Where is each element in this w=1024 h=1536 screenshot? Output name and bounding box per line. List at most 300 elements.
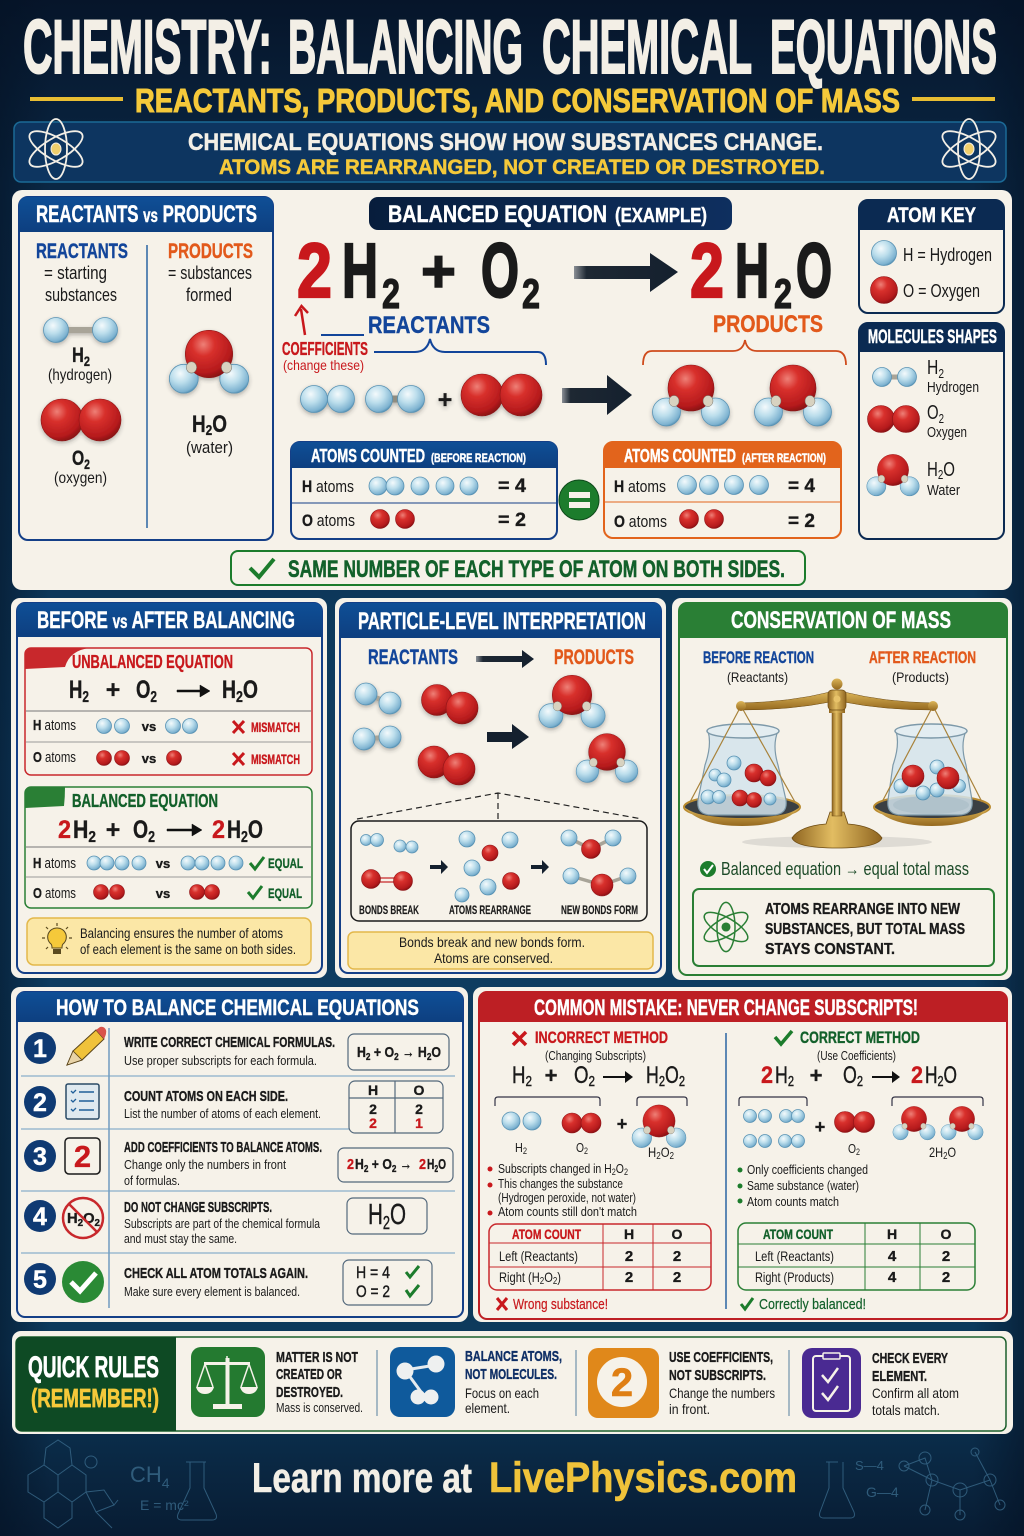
equation: reactants side <box>297 228 540 317</box>
rule: check: Confirm all atom <box>872 1385 959 1401</box>
sub-panel: balanced equation: H <box>73 816 91 844</box>
table: atoms counted after: (AFTER REACTION) <box>742 451 826 465</box>
label: reactants with brace: REACTANTS <box>368 312 490 339</box>
table: incorrect atom count: H <box>624 1226 634 1242</box>
table: incorrect atom count: 2 <box>673 1269 681 1286</box>
sub-panel: unbalanced equation: MISMATCH <box>251 720 300 735</box>
callout: balancing tip: of each element is the same on both sides. <box>80 941 296 957</box>
banner: intro statement <box>14 119 1006 182</box>
rule: check: CHECK EVERY <box>872 1350 948 1367</box>
column: incorrect method: Atom counts still don't match <box>498 1204 637 1219</box>
panel: conservation of mass <box>672 598 1012 980</box>
step 2: 2 <box>33 1089 47 1117</box>
molecules: reactants row: + <box>438 386 452 414</box>
banner: intro statement: CHEMICAL EQUATIONS SHOW HOW SUBSTANCES CHANGE. <box>188 129 823 156</box>
column: incorrect method: O <box>576 1140 586 1155</box>
column: incorrect method: 2 <box>656 1151 661 1162</box>
icon: coefficient 2 <box>65 1138 100 1174</box>
callout: atoms rearrange: ATOMS REARRANGE INTO NEW <box>765 901 961 918</box>
column: correct method: 2 <box>857 1073 863 1090</box>
panel: reactants vs products: 2 <box>84 456 90 472</box>
panel: before vs after balancing <box>11 598 327 978</box>
panel: molecule shapes: 2 <box>939 411 944 426</box>
equation: product side <box>690 228 832 317</box>
rule: atoms: BALANCE ATOMS, <box>465 1348 562 1365</box>
step 4 <box>24 1198 427 1246</box>
beakers <box>698 731 786 815</box>
rule: atoms: NOT MOLECULES. <box>465 1366 557 1383</box>
column: incorrect method: O <box>665 1062 679 1089</box>
sub-panel: balanced equation <box>25 787 312 908</box>
step 4: DO NOT CHANGE SUBSCRIPTS. <box>124 1199 272 1216</box>
step 5: Make sure every element is balanced. <box>124 1284 300 1299</box>
icon: pencil <box>67 1027 106 1065</box>
column: correct method: CORRECT METHOD <box>800 1028 920 1047</box>
callout: atoms rearrange: SUBSTANCES, BUT TOTAL MASS <box>765 921 965 938</box>
H2 molecule <box>44 318 118 342</box>
step 2: COUNT ATOMS ON EACH SIDE. <box>124 1088 288 1105</box>
panel: atom key <box>859 200 1004 313</box>
rule: atoms: element. <box>465 1400 510 1416</box>
icon: light bulb <box>42 923 72 954</box>
table: atoms counted before <box>291 442 557 539</box>
step 3: 2 <box>434 1164 438 1175</box>
panel: conservation of mass: (Products) <box>892 669 949 685</box>
icon: number 2: 2 <box>611 1361 633 1405</box>
table: correct atom count: O <box>941 1226 952 1242</box>
step 3: H <box>355 1156 366 1173</box>
heading: balanced equation: BALANCED EQUATION <box>388 201 607 228</box>
step 3 <box>24 1138 453 1188</box>
panel: reactants vs products: 2 <box>206 422 212 439</box>
table: correct atom count: H <box>887 1226 897 1242</box>
panel: molecule shapes: H <box>927 459 941 481</box>
step 3: H <box>427 1156 438 1173</box>
panel: quick rules: QUICK RULES <box>28 1351 159 1384</box>
step 3: 2 <box>392 1164 397 1175</box>
callout: same number of atoms: SAME NUMBER OF EACH TYPE OF ATOM ON BOTH SIDES. <box>288 556 785 583</box>
panel: reactants vs products: H <box>72 344 87 367</box>
table: correct atom count: Right (Products) <box>755 1269 834 1285</box>
panel: molecule shapes: 2 <box>938 366 944 381</box>
footer: website <box>252 1454 797 1502</box>
table: correct atom count: 2 <box>942 1269 950 1286</box>
panel: molecule shapes: O <box>927 402 943 424</box>
arrow: main equation <box>574 253 678 292</box>
callout: atoms conserved: Atoms are conserved. <box>434 950 553 966</box>
panel: particle-level interpretation: REACTANTS <box>368 646 458 669</box>
panel: reactants vs products <box>19 197 273 540</box>
sub-panel: unbalanced equation: H <box>69 676 87 704</box>
table: correct atom count: 4 <box>888 1248 897 1265</box>
panel: reactants vs products: = substances <box>168 263 252 283</box>
sub-panel: balanced equation: BALANCED EQUATION <box>72 791 218 811</box>
step 3: 2 <box>347 1156 354 1173</box>
column: correct method: 2 <box>911 1062 923 1089</box>
sub-panel: balanced equation: EQUAL <box>268 885 302 901</box>
rule: coefficients: in front. <box>669 1401 710 1417</box>
right contents <box>930 760 944 774</box>
column: incorrect method: H <box>646 1062 663 1089</box>
step 3: of formulas. <box>124 1173 180 1188</box>
label: products with brace <box>643 311 846 365</box>
panel: conservation of mass: (Reactants) <box>727 669 788 685</box>
sub-panel: unbalanced equation: O <box>243 676 258 704</box>
column: incorrect method: Subscripts changed in H <box>498 1161 639 1176</box>
arrow: reaction <box>487 724 529 749</box>
equation: reactants side: + <box>421 238 456 305</box>
rule: atoms <box>390 1347 562 1417</box>
table: correct atom count: ATOM COUNT <box>763 1226 833 1242</box>
rule: coefficients: NOT SUBSCRIPTS. <box>669 1367 766 1384</box>
table: atoms counted before: = 4 <box>498 476 526 497</box>
icon: no H2O2: 2 <box>78 1218 84 1229</box>
panel: quick rules <box>12 1331 1013 1434</box>
step 3: ADD COEFFICIENTS TO BALANCE ATOMS. <box>124 1139 322 1156</box>
table: correct atom count: Left (Reactants) <box>755 1248 834 1264</box>
step 1: Use proper subscripts for each formula. <box>124 1053 317 1068</box>
label: products with brace: PRODUCTS <box>713 311 823 338</box>
step 5: 5 <box>33 1266 47 1294</box>
column: incorrect method: 2 <box>679 1073 685 1090</box>
panel: reactants vs products: O <box>72 447 88 470</box>
step 4: H <box>368 1199 389 1231</box>
column: correct method: 2H <box>929 1144 947 1160</box>
column: incorrect method: O <box>661 1144 670 1160</box>
panel: conservation of mass: BEFORE REACTION <box>703 648 814 667</box>
panel: reactants vs products: (hydrogen) <box>48 367 112 384</box>
panel: how to balance: HOW TO BALANCE CHEMICAL EQUATIONS <box>56 995 419 1020</box>
footer decoration: left chemistry sketches: 4 <box>162 1475 170 1491</box>
table: atoms counted before: H atoms <box>302 477 354 496</box>
panel: molecule shapes: O <box>943 459 955 481</box>
sub-panel: balanced equation: 2 <box>212 816 225 844</box>
post and base <box>792 812 882 848</box>
rule: coefficients <box>588 1348 775 1418</box>
column: incorrect method: 2 <box>659 1073 665 1090</box>
column: correct method: O <box>843 1062 862 1089</box>
sub-panel: balanced equation: vs <box>156 886 170 901</box>
rule: check: totals match. <box>872 1402 940 1418</box>
O2 molecule <box>41 399 121 441</box>
step 1: 2 <box>394 1052 399 1063</box>
panel: main white card <box>12 190 1012 590</box>
column: correct method: H <box>925 1062 942 1089</box>
table: incorrect atom count: ATOM COUNT <box>512 1226 581 1242</box>
strings <box>690 706 982 802</box>
step 5: H = 4 <box>356 1263 390 1282</box>
heading: balanced equation: (EXAMPLE) <box>615 205 707 227</box>
sub-panel: balanced equation: 2 <box>58 816 71 844</box>
column: incorrect method: INCORRECT METHOD <box>535 1028 668 1047</box>
callout: coefficients: COEFFICIENTS <box>282 339 368 359</box>
icon: molecules white <box>390 1347 455 1417</box>
table: atoms counted before: = 2 <box>498 510 526 531</box>
icon: checklist <box>66 1084 99 1119</box>
icon: coefficient 2: 2 <box>74 1139 91 1174</box>
sub-panel: balanced equation: EQUAL <box>268 855 303 871</box>
column: incorrect method: 2 <box>624 1167 628 1177</box>
footer decoration: left chemistry sketches: E = mc² <box>140 1497 189 1513</box>
label: reactants with brace <box>368 312 546 365</box>
column: incorrect method <box>488 1028 711 1313</box>
table: atoms counted after: ATOMS COUNTED <box>624 446 736 466</box>
step 1: H <box>357 1044 368 1061</box>
equation: product side: O <box>796 228 832 314</box>
sub-panel: bond process: NEW BONDS FORM <box>561 903 638 917</box>
table: correct atom count: 4 <box>888 1269 897 1286</box>
step 5: O = 2 <box>356 1282 390 1301</box>
title <box>23 5 997 90</box>
molecules: products row <box>652 365 832 426</box>
column: incorrect method: 2 <box>670 1151 674 1162</box>
statement: equal total mass: Balanced equation → equal total mass <box>721 859 969 879</box>
step 2: 2 <box>369 1115 377 1131</box>
panel: molecule shapes: Oxygen <box>927 424 967 441</box>
table: atoms counted before: ATOMS COUNTED <box>311 446 425 466</box>
icon: scales <box>191 1347 265 1417</box>
sub-panel: unbalanced equation: 2 <box>82 689 89 706</box>
panel: particle-level interpretation: PRODUCTS <box>554 646 634 669</box>
sub-panel: unbalanced equation: H atoms <box>33 717 76 734</box>
sub-panel: bond process: BONDS BREAK <box>359 903 419 917</box>
step 4: and must stay the same. <box>124 1231 237 1246</box>
footer decoration: left chemistry sketches: CH <box>130 1462 162 1487</box>
table: atoms counted before: (BEFORE REACTION) <box>431 451 526 465</box>
table: incorrect atom count: 2 <box>540 1276 545 1287</box>
column: correct method: 2 <box>788 1073 794 1090</box>
sub-panel: balanced equation: O atoms <box>33 885 76 902</box>
callout: balancing tip <box>27 918 311 965</box>
sub-panel: balanced equation: + <box>106 816 120 844</box>
table: incorrect atom count: 2 <box>553 1276 558 1287</box>
arrow: reactants to products <box>476 650 534 668</box>
column: incorrect method: H <box>648 1144 658 1160</box>
step 3: Change only the numbers in front <box>124 1157 286 1172</box>
panel: atom key: H = Hydrogen <box>903 245 992 265</box>
sub-panel: unbalanced equation: MISMATCH <box>251 752 300 767</box>
column: incorrect method: 2 <box>589 1073 595 1090</box>
callout: atoms rearrange <box>693 889 994 966</box>
step 1: O <box>431 1044 441 1061</box>
panel: conservation of mass: AFTER REACTION <box>869 648 976 667</box>
panel: reactants vs products: (water) <box>186 438 233 457</box>
footer: website: LivePhysics.com <box>489 1454 797 1502</box>
column: correct method: O <box>848 1141 858 1156</box>
column: incorrect method: This changes the substance <box>498 1176 623 1191</box>
table: incorrect atom count <box>489 1224 711 1290</box>
step 1: 2 <box>366 1052 371 1063</box>
sub-panel: unbalanced equation: 2 <box>236 689 243 706</box>
sub-panel: balanced equation: 2 <box>148 829 155 846</box>
step 4: O <box>390 1199 406 1231</box>
sub-panel: unbalanced equation: UNBALANCED EQUATION <box>72 652 233 672</box>
column: correct method: H <box>775 1062 792 1089</box>
table: atoms counted after: = 2 <box>788 511 815 532</box>
column: correct method: 2 <box>761 1062 773 1089</box>
column: incorrect method: O <box>616 1161 624 1176</box>
table: incorrect atom count: ) <box>557 1269 561 1285</box>
step 4: 2 <box>383 1213 390 1233</box>
rule: check: ELEMENT. <box>872 1368 927 1385</box>
step 1 <box>24 1027 449 1070</box>
icon: atom right <box>938 119 1000 179</box>
table: atoms counted before: O atoms <box>302 511 355 530</box>
panel: particle-level interpretation: PARTICLE-LEVEL INTERPRETATION <box>358 608 646 635</box>
panel: reactants vs products: PRODUCTS <box>168 240 253 263</box>
sub-panel: balanced equation: 2 <box>88 829 96 846</box>
equation: reactants side: 2 <box>522 270 540 317</box>
footer: website: Learn more at <box>252 1454 472 1501</box>
molecules: products <box>539 675 638 782</box>
column: correct method: 2 <box>856 1147 860 1157</box>
step 1: 1 <box>33 1035 47 1063</box>
panel: reactants vs products: substances <box>45 285 117 305</box>
icon: atom left <box>25 119 87 179</box>
footer decoration: right chemistry sketches: G—4 <box>866 1484 899 1500</box>
sub-panel: balanced equation: 2 <box>241 829 248 846</box>
panel: quick rules: (REMEMBER!) <box>31 1383 159 1413</box>
molecules: reactants row <box>300 374 542 416</box>
sub-panel: balanced equation: H <box>227 816 245 844</box>
callout: balancing tip: Balancing ensures the number of atoms <box>80 925 283 941</box>
panel: reactants vs products: (oxygen) <box>54 470 107 487</box>
step 4: Subscripts are part of the chemical formula <box>124 1216 321 1231</box>
sub-panel: unbalanced equation: H <box>222 676 240 704</box>
panel: particle-level interpretation <box>335 598 666 978</box>
zoom lines <box>357 793 642 821</box>
panel: reactants vs products: REACTANTS vs PRODUCTS <box>36 201 257 228</box>
sub-panel: unbalanced equation: vs <box>142 751 156 766</box>
table: atoms counted after: = 4 <box>788 476 815 497</box>
rule: matter: MATTER IS NOT <box>276 1349 358 1366</box>
column: correct method: 2 <box>943 1151 948 1162</box>
icon: no H2O2: H <box>67 1210 78 1227</box>
column: incorrect method: 2 <box>612 1167 616 1177</box>
panel: how to balance <box>11 987 468 1322</box>
step 1: 2 <box>427 1052 432 1063</box>
equation: reactants side: 2 <box>382 270 400 317</box>
footer decoration: left chemistry sketches <box>28 1440 216 1528</box>
column: incorrect method: H <box>512 1062 529 1089</box>
column: correct method: Correctly balanced! <box>759 1296 866 1313</box>
beam <box>741 692 933 710</box>
equation: reactants side: O <box>481 228 519 314</box>
equation: product side: H <box>735 228 769 314</box>
column: incorrect method: 2 <box>526 1073 532 1090</box>
rule: matter <box>191 1347 363 1417</box>
sub-panel: unbalanced equation: vs <box>142 719 156 734</box>
table: incorrect atom count: 2 <box>673 1248 681 1265</box>
callout: coefficients <box>282 306 368 373</box>
column: correct method <box>738 1028 983 1313</box>
step 5 <box>24 1260 432 1305</box>
column: incorrect method: (Hydrogen peroxide, not water) <box>498 1190 636 1205</box>
panel: molecule shapes <box>859 323 1004 539</box>
icon: no H2O2: 2 <box>95 1218 100 1229</box>
table: incorrect atom count: O <box>672 1226 683 1242</box>
panel: atom key: O = Oxygen <box>903 281 980 301</box>
sub-panel: balanced equation: O <box>248 816 263 844</box>
molecules: reactants <box>353 683 478 785</box>
step 2: 2 <box>415 1101 423 1117</box>
footer decoration: right chemistry sketches: S—4 <box>855 1458 884 1473</box>
rule: matter: DESTROYED. <box>276 1384 343 1401</box>
step 2: 1 <box>415 1115 423 1131</box>
column: correct method: (Use Coefficients) <box>817 1049 896 1063</box>
panel: reactants vs products: REACTANTS <box>36 240 128 263</box>
table: atoms counted after: H atoms <box>614 477 666 496</box>
table: atoms counted after <box>604 442 841 538</box>
panel: molecule shapes: Water <box>927 482 960 499</box>
step 1: + O <box>370 1044 394 1061</box>
sub-panel: balanced equation: vs <box>156 856 170 871</box>
icon: clipboard <box>802 1348 861 1418</box>
panel: reactants vs products: formed <box>186 285 232 305</box>
equation: product side: 2 <box>690 228 724 314</box>
sub-panel: unbalanced equation: + <box>106 676 120 704</box>
panel: molecule shapes: 2 <box>938 467 943 482</box>
table: correct atom count <box>738 1223 975 1290</box>
step 3: → <box>396 1156 412 1173</box>
callout: atoms conserved: Bonds break and new bonds form. <box>399 934 585 950</box>
pans <box>684 795 800 819</box>
table: incorrect atom count: 2 <box>625 1269 633 1286</box>
rule: coefficients: USE COEFFICIENTS, <box>669 1349 773 1366</box>
icon: no H2O2: O <box>83 1210 95 1227</box>
step 3: 2 <box>419 1156 426 1173</box>
table: incorrect atom count: O <box>544 1269 553 1285</box>
title: BALANCING <box>288 5 523 90</box>
sub-panel: unbalanced equation: O <box>136 676 155 704</box>
column: incorrect method: H <box>515 1140 524 1155</box>
column: incorrect method: O <box>574 1062 593 1089</box>
rule: check <box>802 1348 959 1418</box>
rule: atoms: Focus on each <box>465 1385 539 1401</box>
column: incorrect method: (Changing Subscripts) <box>545 1049 646 1063</box>
callout: atoms rearrange: STAYS CONSTANT. <box>765 941 895 958</box>
panel: molecule shapes: H <box>927 357 941 379</box>
column: correct method: O <box>947 1144 956 1160</box>
sub-panel: balanced equation: H atoms <box>33 855 76 872</box>
sub-panel: bond process <box>351 821 647 921</box>
equation: reactants side: 2 <box>297 228 332 314</box>
H2O molecule <box>169 330 249 393</box>
column: correct method: 2 <box>938 1073 944 1090</box>
table: incorrect atom count: Right (H <box>499 1269 550 1285</box>
column: incorrect method: + <box>545 1063 557 1088</box>
panel: reactants vs products: O <box>212 411 227 438</box>
panel: reactants vs products: H <box>192 411 209 438</box>
column: correct method: Only coefficients changed <box>747 1162 868 1177</box>
panel: reactants vs products: 2 <box>84 353 90 369</box>
column: incorrect method: Wrong substance! <box>513 1296 608 1313</box>
step 1: WRITE CORRECT CHEMICAL FORMULAS. <box>124 1034 335 1051</box>
panel: molecule shapes: Hydrogen <box>927 379 979 396</box>
callout: atoms conserved <box>348 932 653 969</box>
step 2: List the number of atoms of each element. <box>124 1106 321 1121</box>
icon: check circle <box>62 1261 104 1303</box>
step 2: O <box>414 1082 425 1098</box>
title: CHEMICAL <box>542 5 752 90</box>
sub-panel: bond process: ATOMS REARRANGE <box>449 903 531 917</box>
column: correct method: + <box>815 1117 825 1137</box>
table: correct atom count: 2 <box>942 1248 950 1265</box>
step 3: + O <box>368 1156 392 1173</box>
sub-panel: unbalanced equation <box>25 648 312 775</box>
rule: coefficients: Change the numbers <box>669 1385 775 1401</box>
column: correct method: Same substance (water) <box>747 1178 859 1193</box>
